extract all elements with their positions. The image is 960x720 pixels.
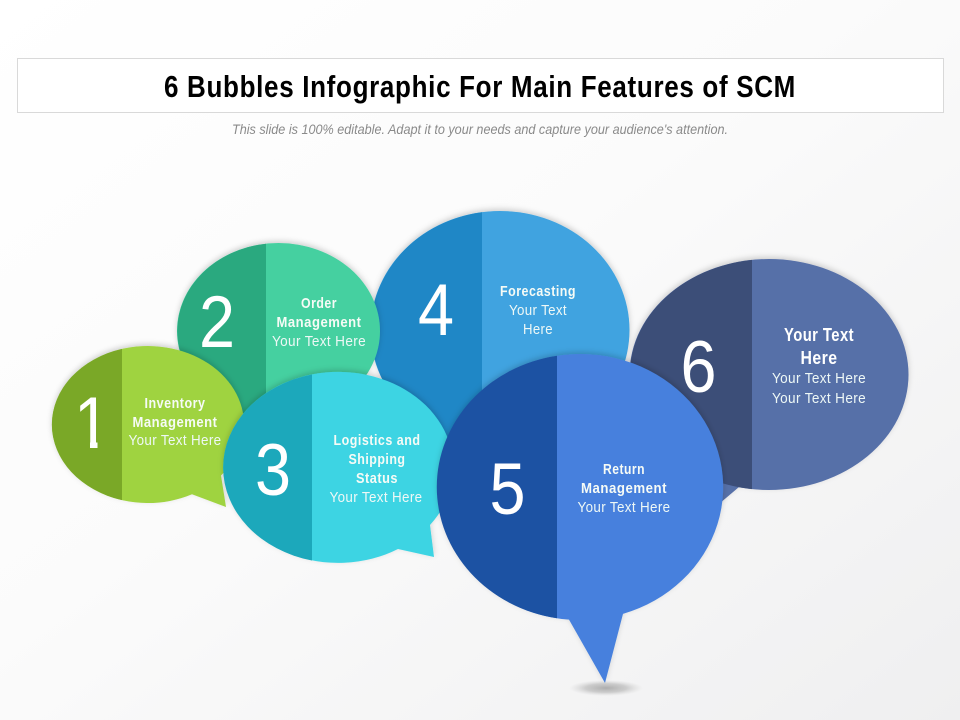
bubble 6: your text here: 6 [680,327,716,408]
bubble 1: inventory management: Inventory [144,395,206,412]
bubble 2: order management: 2 [199,282,235,363]
bubble 6: your text here [630,259,908,520]
bubble 5: return management: Return [603,461,645,478]
bubble 2: order management [177,243,380,419]
bubble 2: order management: Your Text Here [272,333,366,350]
bubble 6: your text here: Your Text [784,325,854,345]
bubble 2: order management: Order [301,295,337,312]
bubble 4: forecasting: 4 [418,270,454,351]
bubble 5: return management: Management [581,480,667,497]
bubble 3: logistics and shipping status: Status [356,470,398,487]
bubble 5: return management [437,354,723,683]
bubble 4: forecasting: Forecasting [500,283,576,300]
tail shadow [569,680,643,696]
bubble 6: your text here: Here [800,348,838,368]
bubble 3: logistics and shipping status [223,372,453,563]
bubble 4: forecasting: Your Text [509,302,567,319]
bubble 6: your text here: Your Text Here [772,390,866,407]
bubble 5: return management: 5 [490,449,526,530]
bubble 1: inventory management: 1 [74,383,110,464]
bubble 1: inventory management: Management [132,414,218,431]
bubble 1: inventory management: Your Text Here [128,432,222,449]
subtitle: This slide is 100% editable. Adapt it to your needs and capture your audience's attention. [232,121,728,137]
bubble 3: logistics and shipping status: Shipping [348,451,406,468]
bubble 4: forecasting: Here [523,321,553,338]
bubble 4: forecasting [370,211,630,449]
title box: 6 Bubbles Infographic For Main Features of SCM [164,69,796,104]
bubble 6: your text here: Your Text Here [772,370,866,387]
bubble 3: logistics and shipping status: 3 [255,430,291,511]
bubble 1: inventory management [52,346,244,507]
bubble 3: logistics and shipping status: Logistics and [334,432,420,449]
bubble 5: return management: Your Text Here [578,499,670,516]
title box [18,58,944,112]
bubble 3: logistics and shipping status: Your Text Here [330,489,422,506]
bubble 2: order management: Management [276,314,362,331]
